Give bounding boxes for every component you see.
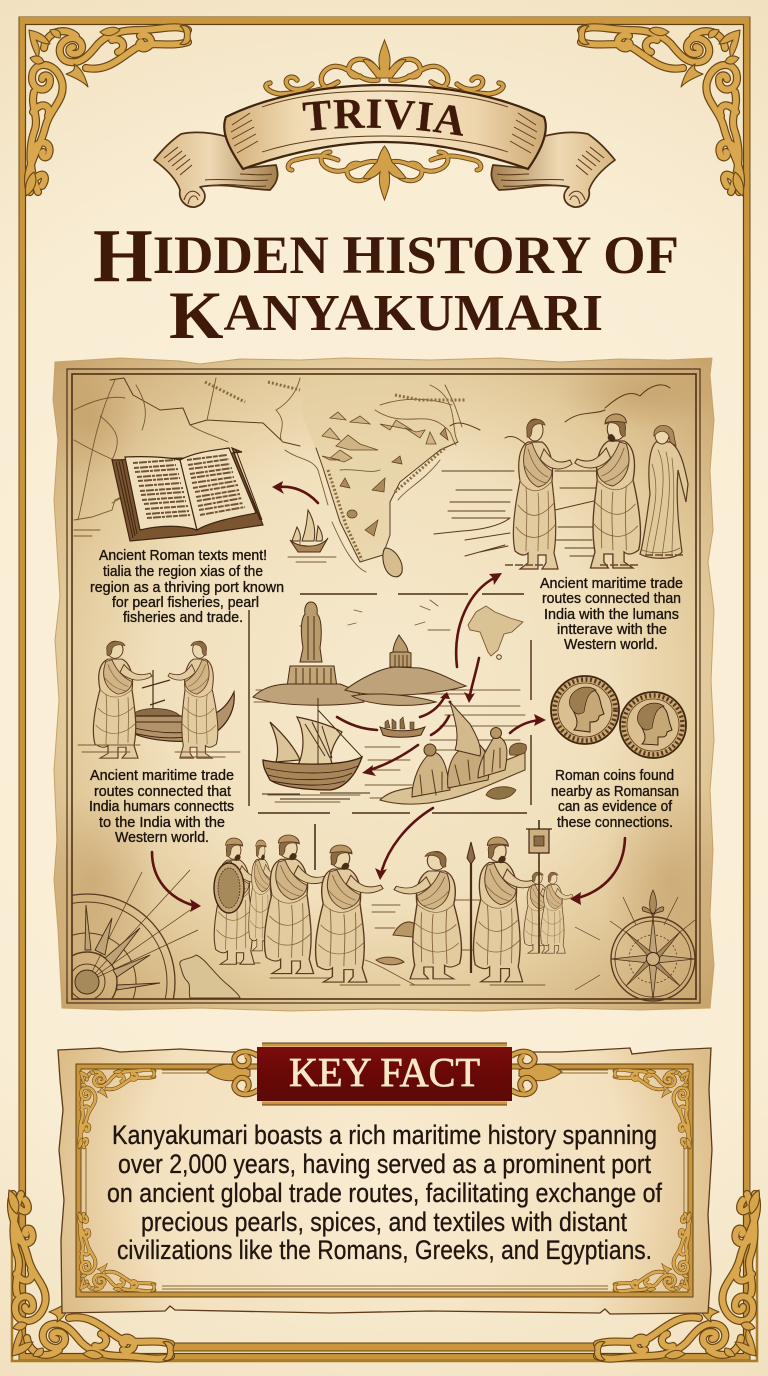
key fact parchment (58, 1048, 712, 1314)
panel: key fact (58, 1043, 712, 1314)
ground and sea lines (236, 900, 545, 985)
central scene (253, 600, 526, 804)
key fact gold frame (76, 1064, 693, 1297)
ornament below ribbon (288, 146, 481, 200)
india landmass (306, 413, 458, 562)
figure: turbaned guard (474, 837, 538, 982)
figure: young trader (394, 851, 461, 979)
trade figures on the shore, top right (434, 385, 688, 569)
figure: turbaned elder (316, 845, 383, 982)
arrow: to coins (510, 720, 540, 733)
key fact body text: Kanyakumari boasts a rich maritime history spanning (112, 1120, 657, 1150)
figure: robed merchant (93, 641, 152, 758)
title line 1: H (93, 214, 153, 298)
figure: spearman (265, 835, 329, 974)
caption: ancient roman texts: region as a thriving port known (90, 579, 284, 596)
figure: attendant two (541, 872, 573, 953)
arrow: central scene to bottom figures (375, 808, 433, 880)
key fact red banner (207, 1043, 562, 1105)
large sailing ship (262, 698, 370, 799)
key fact corner ornaments (78, 1069, 691, 1292)
coin one (551, 676, 619, 744)
left scene: traders and ship (78, 641, 240, 758)
spear left (314, 824, 316, 870)
caption: maritime routes, left: routes connected that (94, 783, 232, 800)
small sailing ship (288, 510, 336, 562)
shield (214, 863, 244, 913)
main title (93, 214, 679, 353)
caption: roman coins: Roman coins found (555, 767, 674, 784)
figure: shield bearer (214, 838, 267, 964)
key fact body text: on ancient global trade routes, facilitating exchange of (107, 1178, 662, 1208)
caption: maritime routes, right: Ancient maritime trade (540, 575, 683, 592)
title line 2: ANYAKUMARI (224, 285, 603, 342)
arrow: coins caption to delegation (570, 838, 625, 905)
caption: maritime routes, right: routes connected than (542, 590, 681, 607)
panel: parchment map (52, 358, 714, 1012)
figure: rear soldier (249, 840, 281, 951)
sri lanka (383, 548, 402, 577)
caption: ancient roman texts: fisheries and trade. (123, 609, 243, 626)
figure: attendants (524, 872, 560, 953)
key fact body text (107, 1120, 662, 1265)
corner ornament: top right (578, 26, 744, 196)
ornament above ribbon (266, 40, 503, 94)
caption: ancient roman texts: Ancient Roman texts ment! (99, 547, 267, 564)
sea lines (254, 600, 525, 802)
mini map of india (468, 606, 523, 659)
map towns (340, 428, 448, 536)
caption: roman coins: nearby as Romansan (551, 783, 679, 800)
map of india and arabian coast (74, 378, 465, 572)
caption: roman coins (551, 767, 679, 831)
key fact body text: civilizations like the Romans, Greeks, and Egyptians. (117, 1235, 652, 1265)
sea lines (434, 385, 670, 556)
ribbon tail hatching (164, 147, 604, 204)
caption: maritime routes, left: to the India with the (99, 814, 225, 831)
title line 1: IDDEN HISTORY OF (153, 225, 679, 285)
central scene frame (249, 594, 531, 813)
caption: roman coins: these connections. (557, 814, 673, 831)
caption: ancient roman texts: tialia the region xias of the (103, 563, 263, 580)
title line 2: K (169, 277, 224, 353)
caption: maritime routes, right: Western world. (564, 636, 658, 653)
figure: bearded trader (513, 419, 572, 569)
temple on island (345, 635, 466, 705)
route arrows in bay (337, 658, 479, 776)
caption: ancient roman texts: for pearl fisheries, pearl (112, 594, 259, 611)
open roman book (112, 448, 263, 541)
ribbon tails (154, 132, 615, 207)
shore shadow (505, 555, 685, 565)
caption: maritime routes, right: intterave with the (557, 621, 667, 638)
compass rose: bottom left (72, 870, 198, 999)
corner ornament: top left (25, 26, 191, 196)
spear right (467, 842, 475, 973)
seated group on headland (380, 700, 526, 804)
trivia ribbon banner (153, 38, 616, 208)
arrow: map to roman book (272, 481, 318, 503)
statue on pedestal and island (253, 602, 364, 705)
banner on pole (526, 820, 552, 953)
corner ornament: bottom left (8, 1190, 174, 1360)
compass rose: bottom right (575, 890, 695, 1001)
caption: maritime routes, left: India humars connectts (89, 798, 234, 815)
caption: maritime routes, right: India with the lumans (544, 606, 679, 623)
eastern ghats stipple (205, 382, 465, 560)
ribbon inner lines and hatching (231, 91, 537, 153)
ribbon body (224, 85, 546, 169)
key fact body text: precious pearls, spices, and textiles with distant (141, 1207, 627, 1237)
map frame (67, 369, 700, 1003)
bottom scene: warriors and delegation (214, 820, 573, 985)
key fact body text: over 2,000 years, having served as a prominent port (118, 1149, 651, 1179)
figure: ship captain (168, 641, 218, 758)
parchment stains (56, 375, 712, 940)
roman coins (510, 676, 686, 758)
arrow: to traders (456, 573, 502, 667)
caption: maritime routes, left: Ancient maritime trade (90, 767, 234, 784)
heading: key fact: KEY FACT (289, 1049, 480, 1095)
boat (128, 670, 234, 741)
small rowing boat with people (380, 717, 425, 737)
caption: maritime routes, left: Western world. (115, 829, 209, 846)
map island bottom left (180, 955, 240, 998)
corner ornament: bottom right (594, 1190, 760, 1360)
map mountains and hills (322, 412, 436, 462)
caption: maritime routes, left (89, 767, 234, 846)
caption: maritime routes, right (540, 575, 683, 653)
caption: ancient roman texts (90, 547, 284, 626)
parchment sheet (53, 358, 714, 1011)
caption: roman coins: can as evidence of (558, 798, 673, 815)
figure: turbaned trader (575, 414, 640, 568)
arrow: left caption to warriors (152, 852, 201, 912)
figure: woman in saree (640, 426, 688, 558)
heading: trivia: TRIVIA (302, 99, 463, 136)
coin two (620, 692, 686, 758)
